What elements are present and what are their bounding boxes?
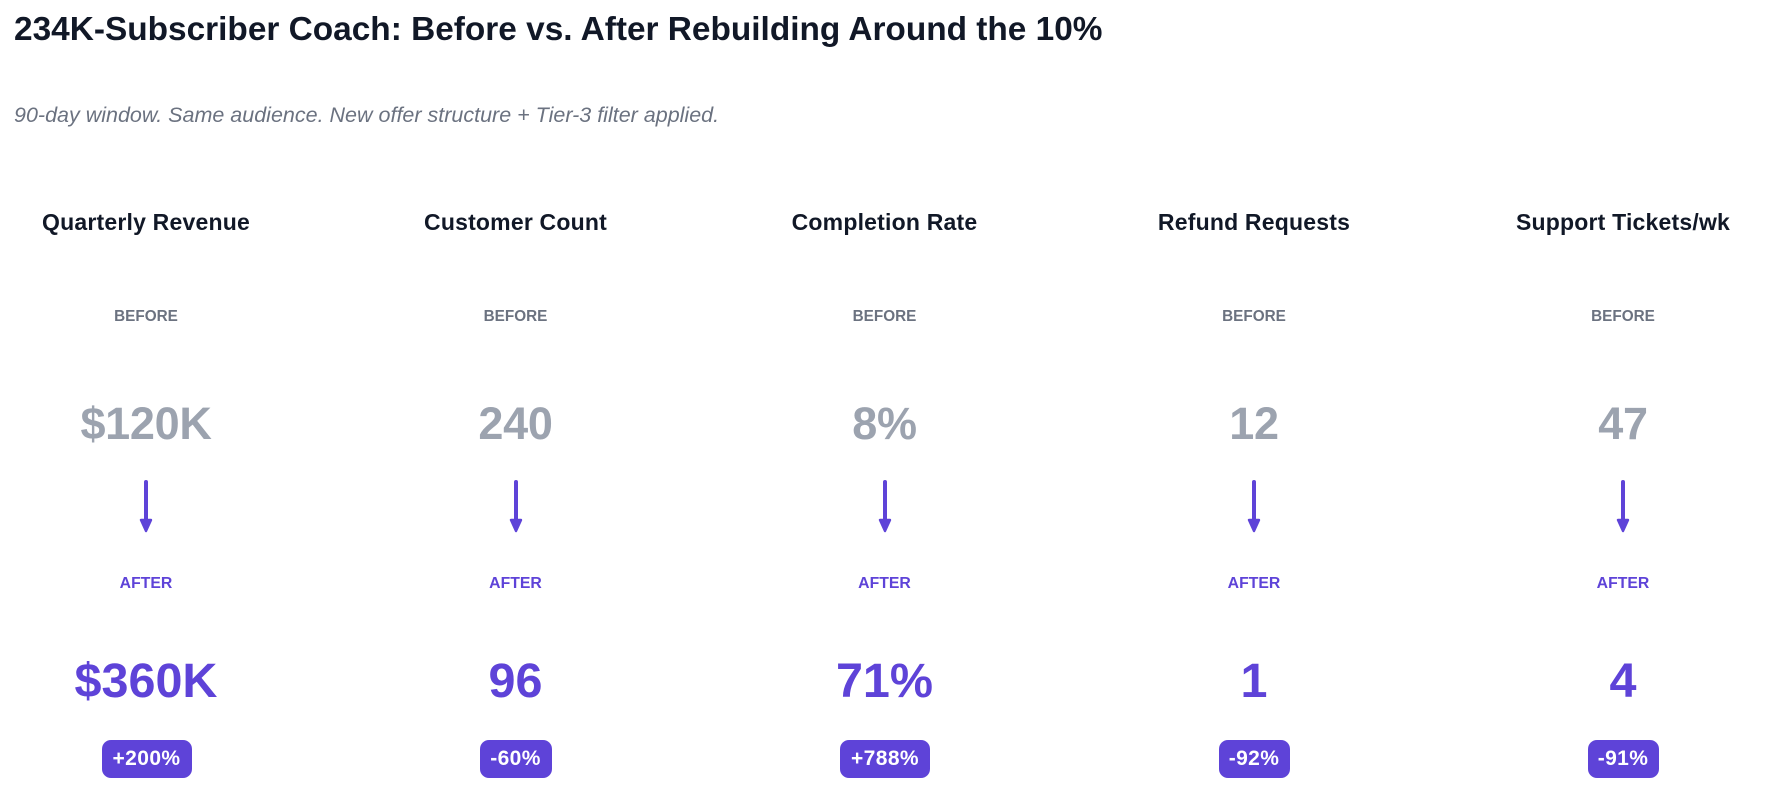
arrow [1248,480,1260,532]
heading: Customer Count [424,208,607,234]
after label: AFTER [489,575,542,592]
before label: BEFORE [114,308,178,325]
after value: 4 [1610,654,1636,708]
after value: 71% [836,654,933,708]
change badge: +200% [112,747,180,770]
change badge: -92% [1229,747,1279,770]
heading: Support Tickets/wk [1516,208,1730,234]
after label: AFTER [1597,575,1649,592]
arrow [140,480,152,532]
change badge: -91% [1598,747,1648,770]
panel: refund requests [1158,208,1350,778]
after value: $360K [75,654,217,708]
after label: AFTER [1228,575,1280,592]
subtitle: 90-day window. Same audience. New offer structure + Tier-3 filter applied. [14,103,719,127]
arrow [1616,480,1630,532]
before label: BEFORE [853,308,916,325]
panel: customer count [424,208,607,778]
change badge [480,740,552,778]
change badge: +788% [851,747,919,770]
heading: Completion Rate [792,208,977,234]
after value: 1 [1240,654,1267,708]
before value: 240 [478,398,553,449]
panel: completion rate [792,208,977,778]
title: 234K-Subscriber Coach: Before vs. After Rebuilding Around the 10% [14,11,1102,48]
before value: 8% [852,398,917,449]
after label: AFTER [858,575,911,592]
change badge [840,740,930,778]
change badge [102,740,192,778]
arrow [878,480,892,532]
after value: 96 [489,654,542,708]
heading: Quarterly Revenue [42,208,250,234]
before value: $120K [80,398,212,449]
change badge [1588,740,1658,778]
before label: BEFORE [1222,308,1286,325]
before label: BEFORE [1591,308,1655,325]
panel: quarterly revenue [42,208,250,778]
panel: support tickets [1516,208,1730,778]
change badge [1218,740,1290,778]
before label: BEFORE [484,308,547,325]
change badge: -60% [490,747,541,770]
after label: AFTER [120,575,172,592]
arrow [510,480,522,532]
before value: 47 [1598,398,1648,449]
heading: Refund Requests [1158,208,1350,234]
before value: 12 [1229,398,1279,449]
